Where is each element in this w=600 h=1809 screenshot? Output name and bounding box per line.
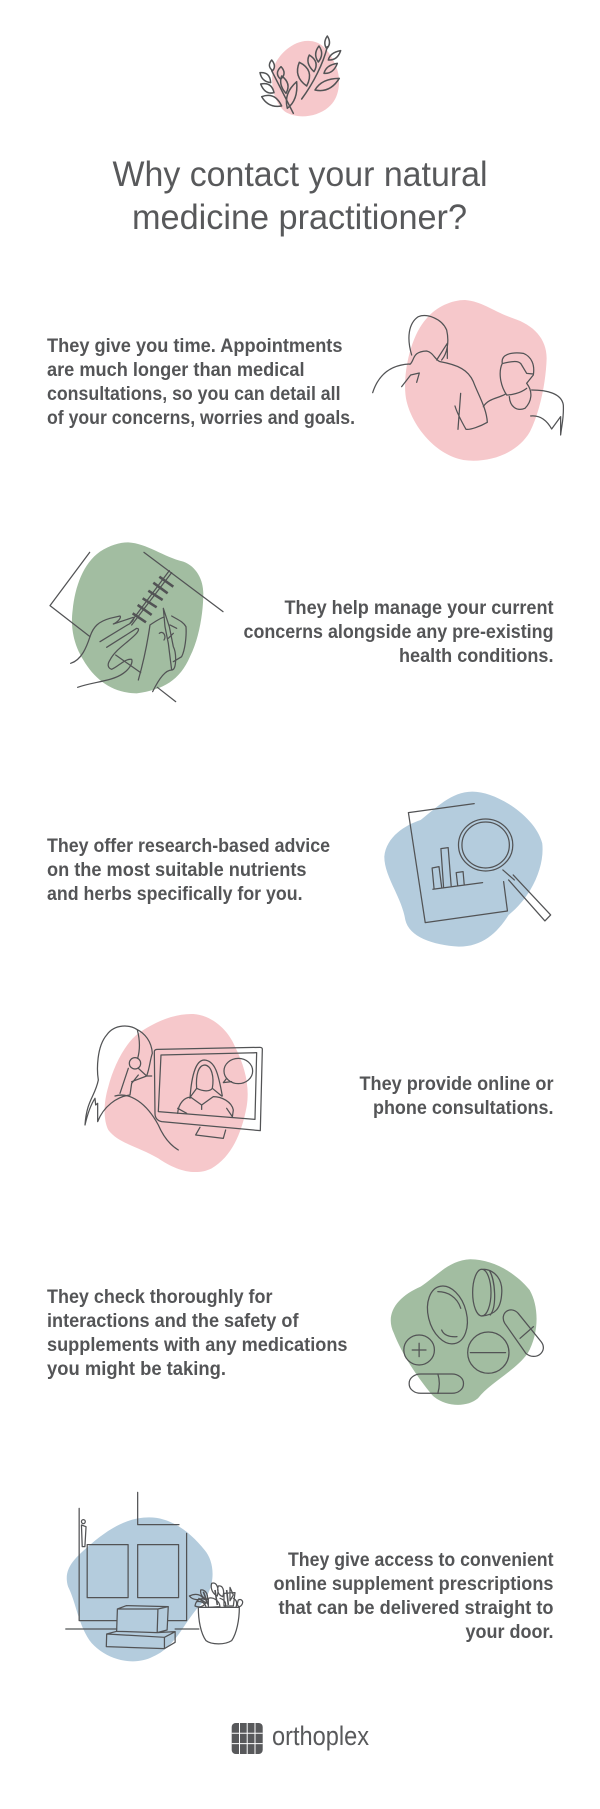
text: delivery: your door. <box>466 1622 554 1643</box>
icon: hands stitching <box>50 542 223 702</box>
text: interactions: you might be taking. <box>47 1359 226 1380</box>
text: online <box>360 1074 554 1119</box>
icon: two people talking <box>373 300 563 461</box>
text: time: consultations, so you can detail all <box>47 384 340 405</box>
text: delivery: that can be delivered straight to <box>278 1598 554 1619</box>
icon: potted plant <box>189 1583 243 1644</box>
icon: leaves <box>260 36 341 116</box>
text: manage: concerns alongside any pre-existing <box>244 622 554 643</box>
title: Why contact your natural <box>112 155 488 194</box>
text: manage: health conditions. <box>399 646 554 667</box>
title: medicine practitioner? <box>132 198 467 237</box>
text: delivery: online supplement prescriptions <box>274 1574 554 1595</box>
text: time <box>47 336 355 429</box>
text: interactions: They check thoroughly for <box>47 1287 273 1308</box>
text: time: of your concerns, worries and goals. <box>47 408 355 429</box>
logo: orthoplex <box>232 1721 369 1754</box>
icon: magnifier and chart <box>384 792 551 947</box>
text: online: phone consultations. <box>373 1098 554 1119</box>
text: delivery: They give access to convenient <box>288 1550 554 1571</box>
text: research: and herbs specifically for you. <box>47 884 302 905</box>
text: time: They give you time. Appointments <box>47 336 342 357</box>
text: research: on the most suitable nutrients <box>47 860 306 881</box>
text: manage <box>244 598 554 667</box>
icon: parcels at front door <box>66 1492 213 1661</box>
icon: video consultation <box>85 1014 262 1172</box>
title <box>112 155 488 237</box>
text: research <box>47 836 330 905</box>
text: interactions <box>47 1287 348 1380</box>
text: interactions: supplements with any medications <box>47 1335 348 1356</box>
text: online: They provide online or <box>360 1074 554 1095</box>
text: research: They offer research-based advice <box>47 836 330 857</box>
text: manage: They help manage your current <box>284 598 554 619</box>
logo: orthoplex: orthoplex <box>272 1721 369 1751</box>
text: time: are much longer than medical <box>47 360 304 381</box>
text: interactions: interactions and the safety of <box>47 1311 299 1332</box>
icon: pills <box>391 1259 543 1405</box>
text: delivery <box>274 1550 554 1643</box>
